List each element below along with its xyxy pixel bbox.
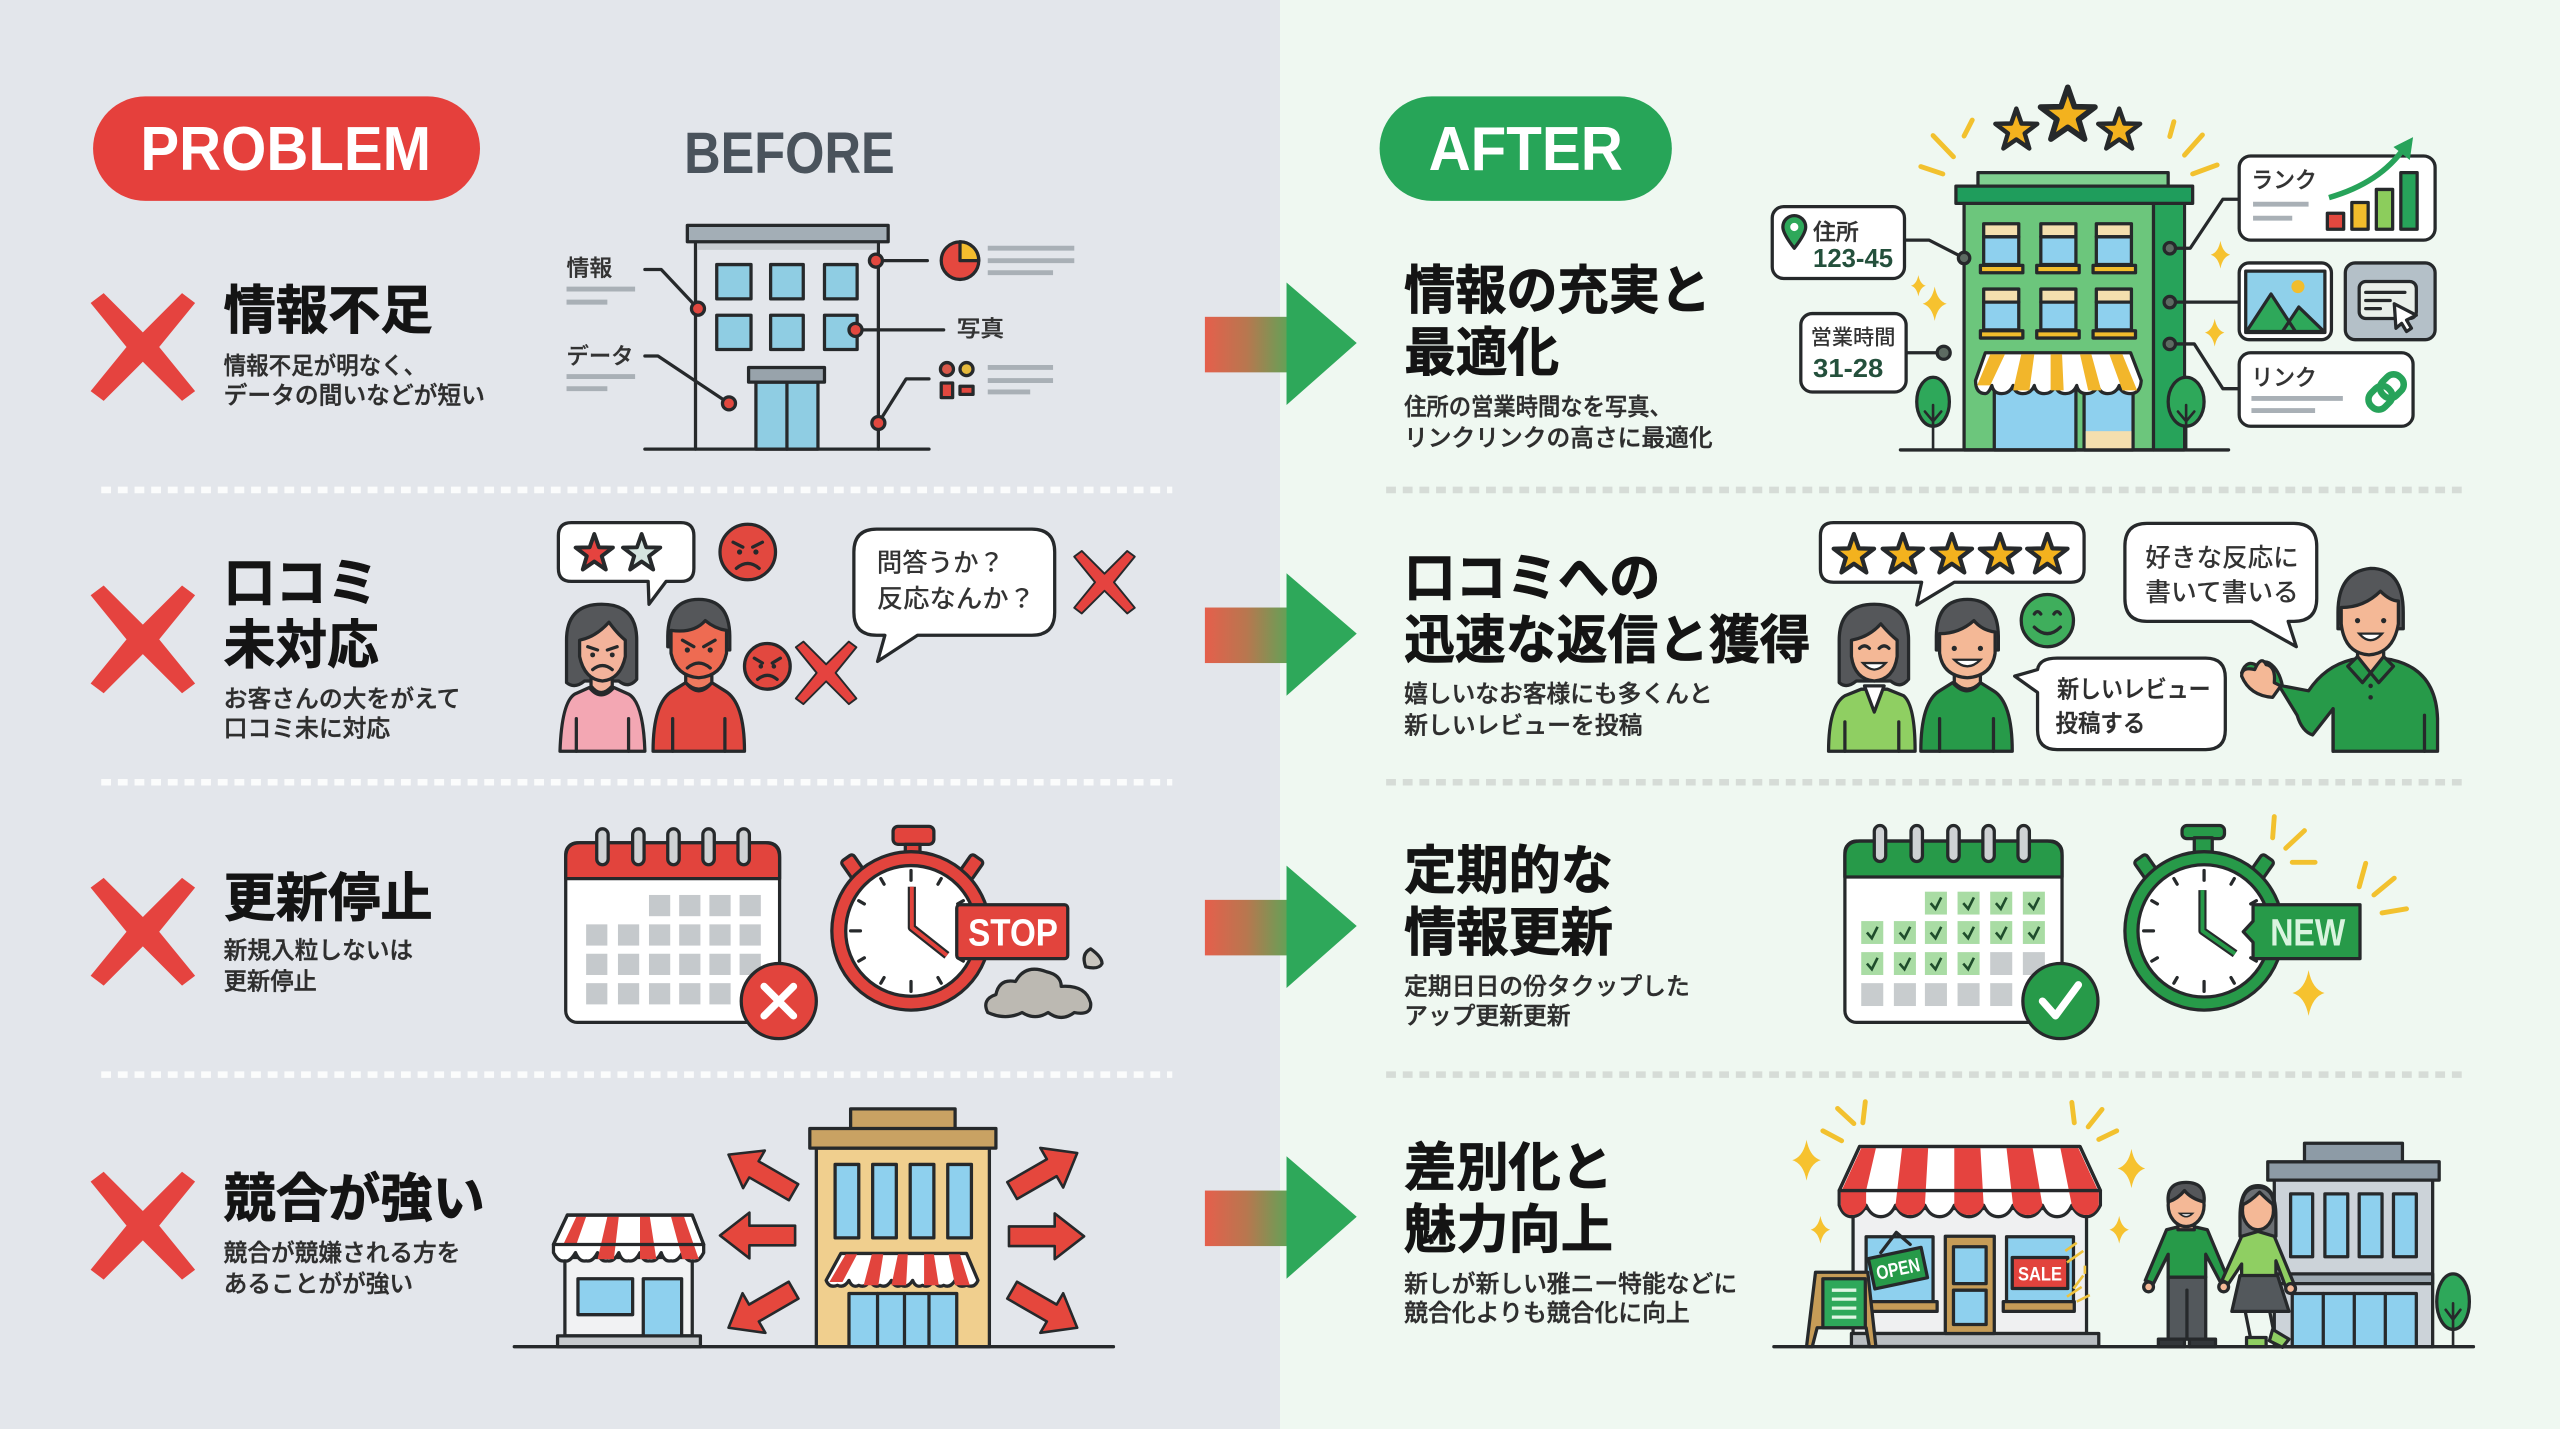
label: データ: データ [567, 343, 633, 369]
panel: before background [0, 0, 1280, 1429]
icon: smiling face [2021, 594, 2073, 647]
card: link [2239, 353, 2413, 426]
sunburst rays [1921, 120, 2217, 174]
binder rings [1874, 826, 2029, 861]
sign: OPEN [1868, 1232, 1928, 1289]
connectors [645, 261, 944, 423]
illustration: attractive shop [1774, 1102, 2473, 1347]
heading: 差別化と魅力向上: 差別化と [1404, 1140, 1613, 1198]
clock hands [2202, 890, 2235, 954]
small shop [553, 1215, 704, 1347]
heading: 情報の充実と最適化: 最適化 [1404, 325, 1559, 383]
bubble: question [854, 529, 1055, 661]
badge: check [2023, 964, 2098, 1039]
illustration: plain building with data labels [567, 225, 1074, 449]
arrows: competitor pressure [717, 1133, 1089, 1348]
icon: angry face [720, 524, 776, 580]
large building [810, 1109, 996, 1347]
row 2 solution text [1404, 550, 1811, 739]
description: リンクリンクの高さに最適化 [1404, 425, 1713, 452]
heading: 定期的な情報更新 [1404, 842, 1613, 962]
binder rings [597, 829, 749, 865]
heading: 定期的な情報更新: 定期的な [1404, 842, 1613, 900]
bubble: reaction [2125, 523, 2317, 647]
description [224, 686, 460, 743]
illustration: stale calendar [566, 829, 816, 1039]
description: 競合化よりも競合化に向上 [1404, 1300, 1690, 1327]
description: 新しが新しい雅ニー特能などに [1404, 1271, 1737, 1298]
heading: BEFORE: BEFORE [684, 121, 895, 186]
icon: pie chart [941, 242, 979, 279]
description: 口コミ未に対応 [224, 716, 391, 743]
bubble: new review [2015, 658, 2225, 750]
icon: small data symbols [940, 363, 973, 398]
arrow: row 3 [1205, 866, 1357, 988]
man [653, 599, 744, 751]
clock hands [912, 887, 947, 955]
icon: outlined cross [1074, 551, 1135, 613]
staff member [2242, 568, 2438, 751]
card: photo [2239, 263, 2331, 340]
description: 嬉しいなお客様にも多くんと [1404, 681, 1713, 708]
description [1404, 974, 1690, 1030]
entrance [749, 367, 824, 449]
card: address: 住所 [1813, 219, 1859, 245]
description [224, 1240, 460, 1298]
badge: cross [741, 964, 816, 1039]
bubble: low rating [558, 523, 694, 604]
badge: AFTER: AFTER [1429, 115, 1623, 184]
stars [1995, 87, 2140, 148]
bubble: question: 反応なんか？ [877, 586, 1035, 614]
row 4 problem text [91, 1171, 485, 1298]
label: 情報: 情報 [567, 255, 612, 281]
heading: 情報の充実と最適化 [1404, 263, 1711, 383]
badge: AFTER [1380, 96, 1672, 201]
description: 競合が競嫌される方を [224, 1240, 460, 1267]
woman [560, 604, 645, 751]
heading: 情報不足: 情報不足 [224, 282, 433, 340]
label: 写真: 写真 [957, 315, 1004, 341]
card: hours: 31-28 [1813, 353, 1883, 383]
heading: 口コミへの迅速な返信と獲得 [1404, 550, 1811, 670]
heading: 口コミへの迅速な返信と獲得: 口コミへの [1404, 550, 1660, 608]
heading: 情報の充実と最適化: 情報の充実と [1404, 263, 1711, 321]
rays [1823, 1102, 2117, 1141]
illustration: checked calendar [1845, 826, 2098, 1039]
card: hours [1801, 314, 1906, 392]
glitter [2065, 1243, 2090, 1302]
card: address: 123-45 [1813, 243, 1893, 273]
row 1 problem text [91, 282, 485, 409]
heading: 定期的な情報更新: 情報更新 [1404, 904, 1613, 962]
dividers [101, 490, 2462, 1075]
description [224, 353, 485, 409]
bubble: new review: 新しいレビュー [2057, 676, 2211, 703]
description: 更新停止 [224, 969, 317, 996]
icon: small angry face [744, 643, 790, 689]
row 3 solution text [1404, 842, 1690, 1030]
sign: OPEN: OPEN [1874, 1254, 1922, 1285]
description: 定期日日の份タクップした [1404, 974, 1690, 1001]
card: link: リンク [2251, 364, 2317, 390]
heading: 競合が強い: 競合が強い [224, 1171, 485, 1229]
check marks [1867, 897, 2039, 969]
date cells [586, 895, 761, 1004]
bubble: reaction: 書いて書いる [2145, 579, 2299, 607]
description: データの間いなどが短い [224, 381, 485, 409]
tag: STOP [957, 905, 1068, 959]
icon: smoke [986, 949, 1102, 1017]
sparkles [1911, 241, 2230, 347]
card: rank chart [2239, 137, 2435, 240]
row 3 problem text [91, 870, 433, 996]
illustration: unhappy customers [558, 523, 1135, 751]
bubble: question: 問答うか？ [877, 550, 1004, 578]
woman figure [2222, 1186, 2296, 1347]
bubble: new review: 投稿する [2056, 711, 2145, 738]
illustration: small shop versus large competitor [514, 1109, 1113, 1348]
illustration: running clock [2125, 817, 2407, 1016]
tag: STOP: STOP [968, 912, 1058, 954]
badge: PROBLEM: PROBLEM [140, 115, 431, 184]
bubble: reaction: 好きな反応に [2145, 545, 2299, 573]
description: 情報不足が明なく、 [224, 353, 426, 380]
row 4 solution text [1404, 1140, 1737, 1327]
icon: red cross [91, 293, 195, 401]
icon: outlined cross [796, 642, 856, 704]
card: address [1772, 207, 1904, 278]
man [1921, 599, 2012, 751]
heading: 口コミ未対応: 未対応 [224, 617, 379, 675]
heading: 差別化と魅力向上: 魅力向上 [1404, 1202, 1613, 1260]
card: hours: 営業時間 [1811, 326, 1896, 350]
description: お客さんの大をがえて [224, 686, 460, 713]
panel: after background [1280, 0, 2560, 1429]
building body [1956, 173, 2193, 450]
description [1404, 394, 1713, 452]
arrow: row 1 [1205, 283, 1357, 405]
heading: 口コミ未対応 [224, 555, 379, 675]
illustration: stopped clock [832, 826, 1102, 1017]
heading: 差別化と魅力向上 [1404, 1140, 1613, 1260]
illustration: happy customers and staff [1820, 523, 2438, 751]
windows [717, 265, 857, 349]
card: rank chart: ランク [2251, 167, 2317, 193]
heading: 更新停止: 更新停止 [224, 870, 433, 928]
bubble: five stars [1820, 523, 2084, 605]
description [1404, 1271, 1737, 1327]
date cells [1861, 892, 2045, 975]
icon: red cross [91, 878, 195, 986]
description: 新しいレビューを投稿 [1404, 712, 1642, 739]
rays [2273, 817, 2407, 913]
icon: red cross [91, 585, 195, 693]
illustration: optimised green building [1772, 87, 2435, 450]
woman [1829, 604, 1915, 751]
badge: PROBLEM [93, 96, 480, 201]
tag: NEW: NEW [2270, 912, 2346, 954]
heading: 口コミへの迅速な返信と獲得: 迅速な返信と獲得 [1404, 612, 1811, 670]
gray building [2268, 1143, 2439, 1347]
storefront [1976, 353, 2141, 450]
sparkle [2293, 970, 2325, 1016]
transition arrows [1205, 283, 1357, 1279]
heading: 口コミ未対応: 口コミ [224, 555, 379, 613]
description: アップ更新更新 [1404, 1003, 1571, 1030]
trees [1917, 377, 2204, 450]
description: あることがが強い [224, 1271, 413, 1298]
clock ticks [2144, 870, 2256, 991]
description [1404, 681, 1713, 739]
description [224, 938, 413, 996]
connectors [1904, 199, 2239, 389]
shop walls [1851, 1209, 2099, 1347]
tree [2437, 1274, 2469, 1346]
row 2 problem text [91, 555, 460, 743]
sign: SALE [2012, 1258, 2068, 1289]
sparkles [1792, 1140, 2145, 1244]
card: click [2345, 263, 2435, 340]
icon: red cross [91, 1172, 195, 1280]
man figure [2144, 1182, 2229, 1347]
description: 新規入粒しないは [224, 938, 413, 965]
arrow: row 2 [1205, 573, 1357, 696]
windows [1980, 224, 2136, 338]
row 1 solution text [1404, 263, 1713, 452]
clock ticks [851, 870, 963, 991]
description: 住所の営業時間なを写真、 [1404, 394, 1672, 421]
sign: SALE: SALE [2018, 1263, 2062, 1285]
tag: NEW [2243, 905, 2360, 959]
roof [687, 225, 888, 242]
striped awning [1839, 1146, 2100, 1217]
arrow: row 4 [1205, 1156, 1357, 1279]
a-frame board [1807, 1272, 1876, 1347]
